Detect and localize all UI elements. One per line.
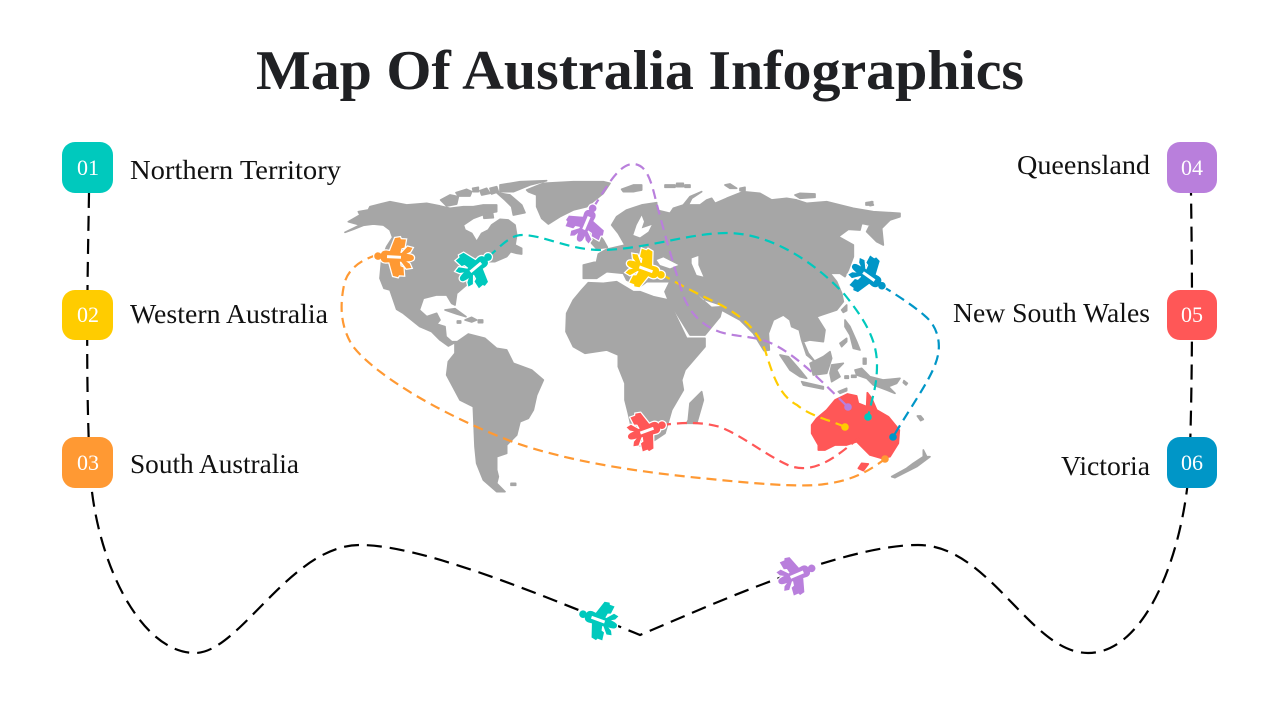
item 06: Victoria bbox=[1061, 451, 1150, 481]
eurasia bbox=[583, 192, 900, 362]
item 05: New South Wales bbox=[953, 298, 1150, 328]
inland seas bbox=[633, 216, 722, 307]
route: orange bbox=[342, 255, 885, 485]
madagascar bbox=[687, 392, 703, 423]
item 04: Queensland bbox=[1017, 150, 1151, 180]
item 03: South Australia bbox=[130, 449, 299, 479]
arctic islands and greenland bbox=[441, 181, 642, 249]
arctic russia islands bbox=[665, 183, 873, 205]
title: Map Of Australia Infographics bbox=[256, 40, 1024, 102]
item 02: Western Australia bbox=[130, 299, 328, 329]
item 04 bbox=[1017, 142, 1217, 193]
item 05 bbox=[953, 290, 1217, 340]
route: yellow bbox=[661, 274, 845, 427]
caribbean islands bbox=[445, 309, 483, 323]
icon: yellow plane bbox=[620, 244, 671, 295]
item 03: 03 bbox=[77, 450, 99, 475]
item 01: 01 bbox=[77, 155, 99, 180]
item 04: 04 bbox=[1181, 155, 1203, 180]
item 06 bbox=[1061, 437, 1217, 488]
new guinea bbox=[855, 368, 907, 393]
item 03 bbox=[62, 437, 299, 488]
new zealand and new caledonia bbox=[892, 416, 930, 478]
route: red bbox=[661, 423, 860, 468]
route: blue bbox=[882, 286, 939, 437]
destination dots in australia bbox=[841, 403, 897, 463]
item 01: Northern Territory bbox=[130, 155, 342, 185]
icon: blue plane bbox=[841, 249, 897, 304]
north america bbox=[345, 202, 522, 346]
south america bbox=[447, 334, 543, 492]
item 05: 05 bbox=[1181, 302, 1203, 327]
item 02: 02 bbox=[77, 302, 99, 327]
route: teal bbox=[488, 233, 877, 417]
japan and north pacific islands bbox=[842, 202, 877, 312]
icon: teal plane bbox=[448, 239, 504, 296]
africa bbox=[566, 282, 705, 446]
item 01 bbox=[62, 142, 342, 193]
australia bbox=[812, 393, 899, 471]
icon: purple plane on route bbox=[771, 548, 823, 601]
item 02 bbox=[62, 290, 328, 340]
indonesia and philippines bbox=[780, 320, 866, 393]
icon: teal plane on route bbox=[573, 594, 624, 645]
item 06: 06 bbox=[1181, 450, 1203, 475]
icon: purple plane bbox=[560, 197, 613, 249]
dashed route connecting the badges bbox=[87, 193, 1192, 653]
icon: orange plane bbox=[373, 236, 415, 278]
world map bbox=[345, 181, 930, 492]
icon: red plane bbox=[621, 405, 672, 456]
route: purple bbox=[593, 164, 848, 407]
